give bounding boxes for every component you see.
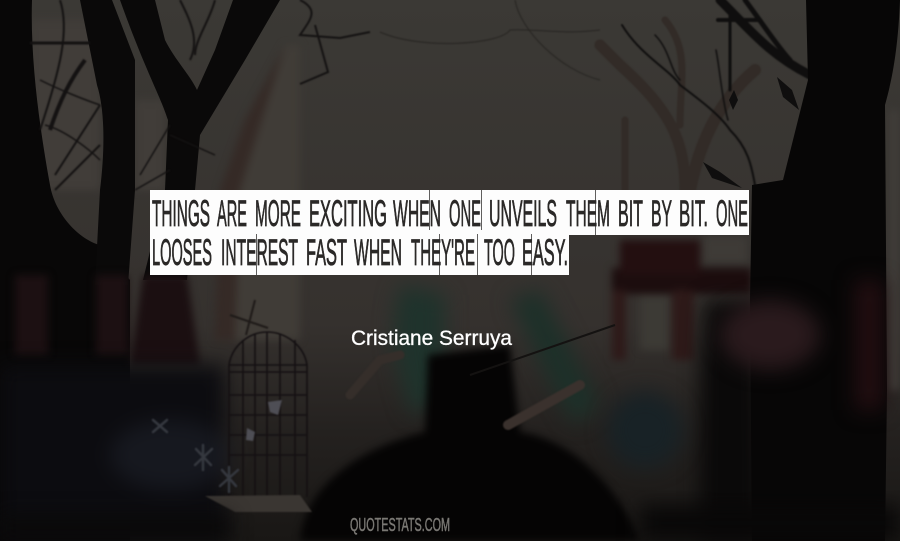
right tree trunk bbox=[750, 0, 900, 541]
quote line 1: THINGS bbox=[152, 193, 210, 234]
quote line 2: FAST bbox=[306, 232, 347, 273]
site watermark: QUOTESTATS.COM bbox=[350, 515, 450, 535]
quote line 1: ONE bbox=[449, 193, 481, 234]
quote line 1: MORE bbox=[255, 193, 301, 234]
quote line 2: TOO bbox=[484, 232, 515, 273]
quote line 1: BY bbox=[651, 193, 672, 234]
author name: Cristiane Serruya bbox=[351, 327, 512, 350]
left bare branches bbox=[30, 0, 600, 190]
dark red trunk glow bbox=[15, 275, 200, 365]
quote line 2: INTEREST bbox=[221, 232, 298, 273]
right flower bed bbox=[607, 392, 683, 468]
lower right dark mass bbox=[700, 300, 760, 541]
quote line 1: THEM bbox=[566, 193, 610, 234]
quote line 1 bbox=[152, 193, 748, 234]
quote line 2: WHEN bbox=[354, 232, 402, 273]
quote line 1: EXCITING bbox=[309, 193, 387, 234]
quote line 2 bbox=[152, 232, 568, 273]
quote line 1: BIT bbox=[618, 193, 643, 234]
musician dress bbox=[300, 345, 640, 541]
right leaves bbox=[703, 77, 799, 188]
quote poster: ONE bbox=[716, 193, 748, 234]
right dark branches bbox=[622, 0, 810, 185]
pale sky patches bbox=[30, 20, 900, 390]
book under the cage bbox=[205, 495, 312, 512]
quote line 2: THEY'RE bbox=[411, 232, 475, 273]
bird cage bbox=[229, 300, 307, 497]
bottom corners shade bbox=[0, 505, 900, 541]
white strips bbox=[150, 190, 749, 235]
right pale background saplings bbox=[600, 20, 755, 190]
star flowers bbox=[153, 420, 238, 492]
left big trunk bbox=[0, 0, 130, 541]
musician arms bbox=[350, 355, 580, 425]
left middle tree bbox=[80, 0, 135, 285]
musician hair bbox=[395, 285, 600, 425]
birds in the cage bbox=[246, 400, 282, 441]
quote line 1: UNVEILS bbox=[489, 193, 557, 234]
blurred red cross shape bbox=[612, 240, 752, 360]
quote line 1: ARE bbox=[217, 193, 247, 234]
quote line 1: BIT. bbox=[679, 193, 708, 234]
violin bow bbox=[470, 325, 615, 375]
quote text block: EASY. bbox=[522, 232, 568, 273]
quote text block bbox=[150, 190, 749, 275]
reddish noise on trunk bbox=[720, 280, 883, 410]
quote line 1: WHEN bbox=[393, 193, 441, 234]
left forked tree bbox=[120, 0, 280, 280]
left flower bed bbox=[0, 365, 230, 541]
quote line 2: LOOSES bbox=[152, 232, 212, 273]
